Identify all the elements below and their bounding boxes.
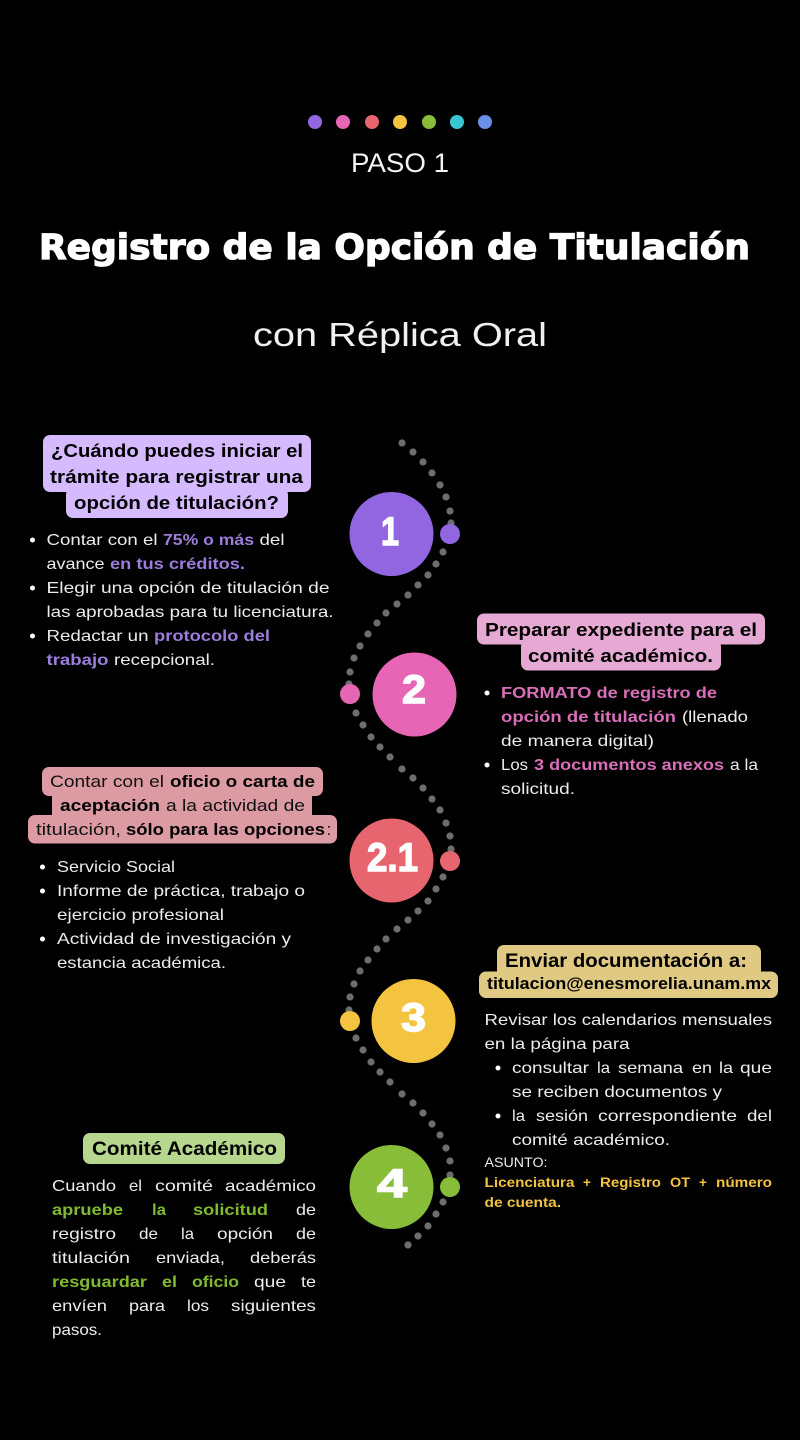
text block: step 4 description: académico: [225, 1178, 316, 1195]
text block: email subject format: +: [699, 1175, 707, 1190]
list: step 2 documents: a la: [730, 757, 758, 774]
text block: step 3 instructions: Revisar los calendarios mensuales: [484, 1012, 772, 1029]
text block: step 3 instructions: [484, 1012, 772, 1149]
step 1 marker: 1: [381, 510, 399, 554]
step 4 marker: 4: [377, 1162, 408, 1206]
text block: step 4 description: pasos.: [52, 1322, 102, 1339]
step 2 marker: 2: [402, 668, 426, 712]
subtitle: con Réplica Oral: [253, 316, 547, 353]
panel: step 3: [479, 945, 778, 1210]
list: step 1 requirements: 75% o más: [163, 532, 254, 549]
title: Registro de la Opción de Titulación: [39, 228, 750, 268]
step 3 marker: 3: [401, 996, 426, 1040]
list: step 2 documents: FORMATO de registro de: [501, 685, 717, 702]
panel: step 1: [30, 435, 334, 669]
text block: email subject format: número: [716, 1175, 772, 1190]
text block: step 4 description: titulación: [52, 1250, 130, 1267]
heading: step 2.1: :: [326, 820, 331, 839]
text block: step 4 description: para: [129, 1298, 165, 1315]
text block: email subject format: de cuenta.: [484, 1195, 561, 1210]
heading: step 2.1: oficio o carta de: [170, 772, 315, 791]
list: step 2.1 options: [40, 859, 305, 972]
text block: step 3 instructions: correspondiente: [598, 1108, 737, 1125]
list: step 1 requirements: en tus créditos.: [110, 556, 245, 573]
list: step 2 documents: (llenado: [682, 709, 748, 726]
list: step 2.1 options: ejercicio profesional: [57, 907, 224, 924]
text block: step 4 description: los: [187, 1298, 209, 1315]
text block: step 4 description: deberás: [250, 1250, 316, 1267]
text block: email subject format: Licenciatura: [484, 1175, 575, 1190]
text block: step 4 description: envíen: [52, 1298, 107, 1315]
label: ASUNTO: ASUNTO:: [484, 1155, 548, 1170]
text block: step 3 instructions: la: [512, 1108, 525, 1125]
list: step 1 requirements: las aprobadas para tu licenciatura.: [46, 604, 334, 621]
heading: step 2: comité académico.: [528, 645, 713, 666]
text block: step 4 description: opción: [217, 1226, 273, 1243]
heading: step 4: Comité Académico: [92, 1139, 277, 1160]
text block: step 4 description: el: [129, 1178, 142, 1195]
panel: step 2.1: [28, 767, 337, 972]
heading: step 2.1: sólo para las opciones: [126, 820, 325, 839]
list: step 2.1 options: Informe de práctica, trabajo o: [57, 883, 305, 900]
text block: step 3 instructions: del: [747, 1108, 772, 1125]
text block: step 4 description: el: [162, 1274, 177, 1291]
list: step 1 requirements: [30, 532, 334, 669]
text block: step 4 description: solicitud: [193, 1202, 268, 1219]
step label: PASO 1: PASO 1: [351, 148, 449, 178]
heading: step 3: Enviar documentación a:: [505, 951, 747, 972]
list: step 2 documents: de manera digital): [501, 733, 654, 750]
text block: step 4 description: enviada,: [156, 1250, 225, 1267]
step 2.1 marker: [350, 818, 460, 902]
text block: step 4 description: Cuando: [52, 1178, 116, 1195]
text block: step 4 description: oficio: [192, 1274, 239, 1291]
step 1 marker: [350, 492, 460, 576]
list: step 1 requirements: Redactar un: [46, 628, 148, 645]
text block: step 3 instructions: semana: [618, 1060, 683, 1077]
text block: step 3 instructions: comité académico.: [512, 1132, 670, 1149]
heading: step 1: trámite para registrar una: [50, 466, 304, 487]
text block: step 3 instructions: la: [597, 1060, 610, 1077]
text block: step 4 description: registro: [52, 1226, 116, 1243]
text block: step 3 instructions: en: [692, 1060, 712, 1077]
list: step 1 requirements: avance: [46, 556, 105, 573]
heading: step 2.1: a la actividad de: [166, 796, 305, 815]
text block: email subject format: OT: [670, 1175, 691, 1190]
heading: step 2: Preparar expediente para el: [485, 619, 757, 640]
text block: step 4 description: resguardar: [52, 1274, 147, 1291]
list: step 2.1 options: estancia académica.: [57, 955, 226, 972]
text block: step 4 description: la: [181, 1226, 194, 1243]
list: step 1 requirements: Elegir una opción de titulación de: [46, 580, 330, 597]
text block: email subject format: +: [583, 1175, 591, 1190]
text block: step 4 description: la: [152, 1202, 166, 1219]
heading: step 1: [43, 435, 311, 518]
heading: step 2.1: titulación,: [36, 820, 121, 839]
text block: step 3 instructions: en la página para: [484, 1036, 630, 1053]
heading: step 3: [479, 945, 778, 998]
text block: step 3 instructions: se reciben documentos y: [512, 1084, 722, 1101]
list: step 2 documents: Los: [501, 757, 528, 774]
decorative colour dots row: [308, 115, 492, 129]
list: step 1 requirements: protocolo del: [154, 628, 270, 645]
heading: step 2.1: [28, 767, 337, 844]
list: step 2.1 options: Actividad de investigación y: [57, 931, 291, 948]
step 2.1 marker: 2.1: [367, 836, 418, 880]
text block: email subject format: Registro: [600, 1175, 661, 1190]
text block: step 3 instructions: que: [740, 1060, 772, 1077]
text block: step 4 description: de: [296, 1226, 316, 1243]
list: step 1 requirements: Contar con el: [46, 532, 158, 549]
text block: step 4 description: siguientes: [231, 1298, 316, 1315]
panel: step 4: [52, 1133, 316, 1339]
text block: step 4 description: que: [254, 1274, 286, 1291]
dotted connecting path: [345, 439, 455, 1249]
list: step 2 documents: [484, 685, 758, 798]
text block: email subject format: [484, 1175, 772, 1210]
text block: step 4 description: de: [139, 1226, 158, 1243]
heading: step 2.1: Contar con el: [50, 772, 164, 791]
list: step 2.1 options: Servicio Social: [57, 859, 175, 876]
text block: step 3 instructions: sesión: [536, 1108, 588, 1125]
heading: step 2: [477, 614, 765, 670]
text block: step 4 description: [52, 1178, 316, 1339]
text block: step 4 description: te: [301, 1274, 316, 1291]
text block: step 4 description: apruebe: [52, 1202, 123, 1219]
text block: step 3 instructions: consultar: [512, 1060, 590, 1077]
list: step 1 requirements: trabajo: [46, 652, 109, 669]
step 2 marker: [340, 652, 456, 736]
list: step 2 documents: solicitud.: [501, 781, 575, 798]
list: step 2 documents: 3 documentos anexos: [534, 757, 724, 774]
heading: step 1: opción de titulación?: [74, 492, 279, 513]
heading: step 3: titulacion@enesmorelia.unam.mx: [487, 974, 772, 993]
heading: step 2.1: aceptación: [60, 796, 160, 815]
list: step 1 requirements: del: [260, 532, 284, 549]
heading: step 1: ¿Cuándo puedes iniciar el: [51, 440, 303, 461]
step 4 marker: [350, 1145, 460, 1229]
list: step 2 documents: opción de titulación: [501, 709, 676, 726]
text block: step 4 description: de: [296, 1202, 316, 1219]
list: step 1 requirements: recepcional.: [114, 652, 215, 669]
text block: step 3 instructions: la: [719, 1060, 733, 1077]
heading: step 4: [83, 1133, 285, 1164]
step 3 marker: [340, 979, 456, 1063]
text block: step 4 description: comité: [155, 1178, 213, 1195]
panel: step 2: [477, 614, 765, 798]
